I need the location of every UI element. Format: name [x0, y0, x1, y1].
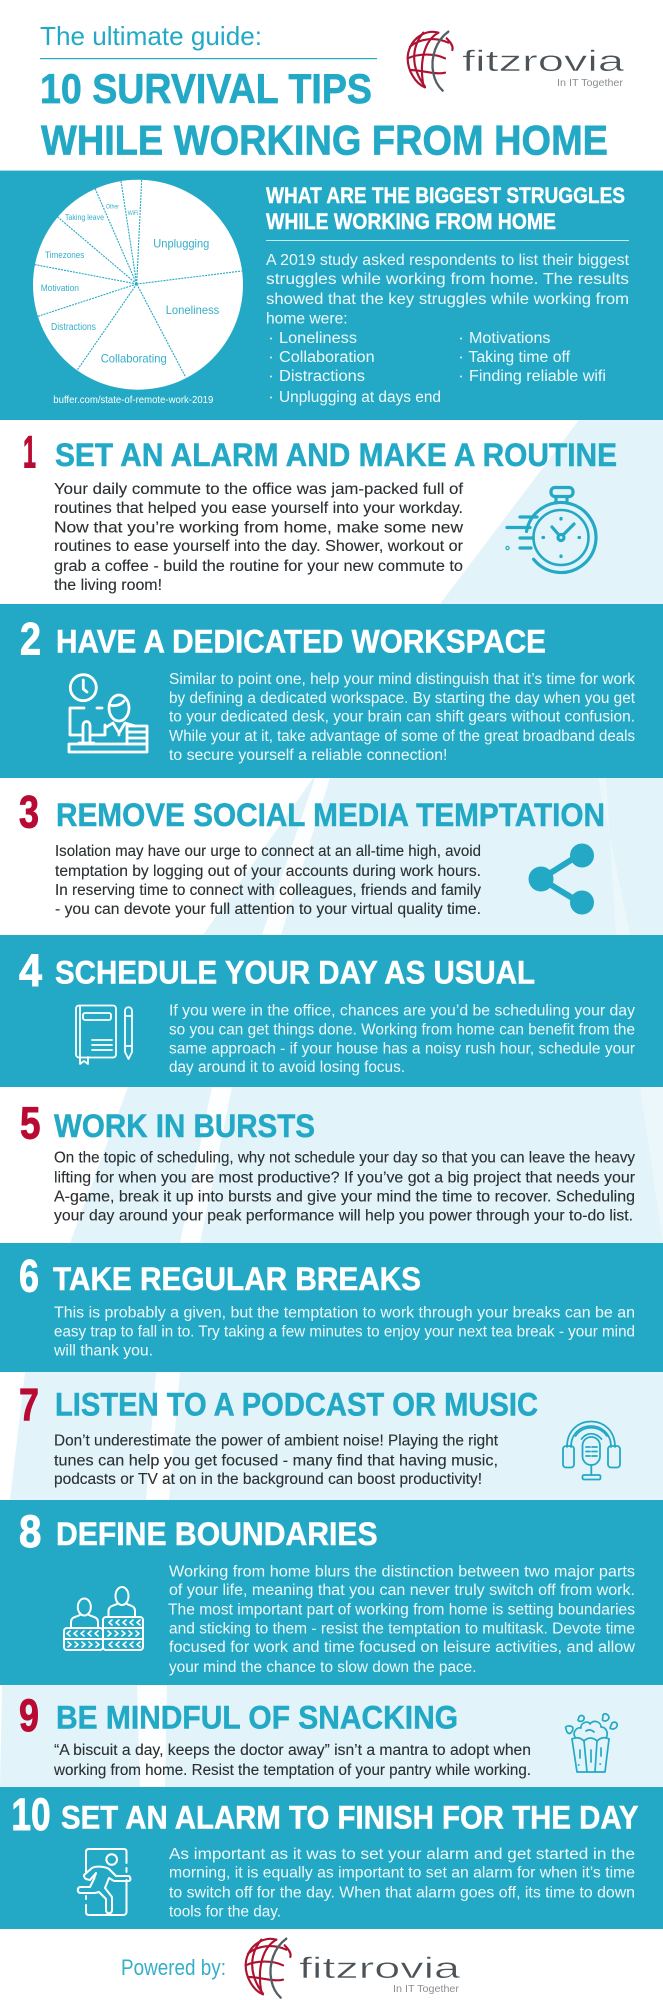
- body 8: of your life, meaning that you can never truly switch off from work.: [169, 1582, 635, 1599]
- body 6: [53, 1304, 635, 1359]
- number 10: 10: [11, 1789, 51, 1840]
- bullet list: Distractions: [279, 368, 365, 385]
- body 7: [54, 1432, 499, 1488]
- logo wordmark: fitzrovia: [462, 45, 624, 78]
- panel: tip 6: [0, 1243, 663, 1372]
- body 1: Your daily commute to the office was jam-packed full of: [54, 481, 464, 498]
- number 9: 9: [19, 1690, 39, 1741]
- logo tagline: In IT Together: [557, 78, 624, 89]
- body 8: [168, 1564, 636, 1676]
- body 2: [169, 671, 636, 764]
- body 6: This is probably a given, but the temptation to work through your breaks can be an: [54, 1304, 635, 1321]
- panel: tip 10: [0, 1787, 663, 1929]
- body 10: [169, 1846, 635, 1920]
- panel: tip 2: [0, 604, 663, 778]
- body 7: podcasts or TV at on in the background can boost productivity!: [54, 1471, 482, 1488]
- body 4: [169, 1002, 635, 1076]
- panel: tip 5: [0, 1087, 663, 1243]
- panel heading: WHILE WORKING FROM HOME: [266, 209, 556, 234]
- body 3: [55, 843, 481, 918]
- icon: red globe footer: [246, 1939, 291, 1998]
- icon: two people at desks: [64, 1587, 143, 1650]
- heading 8: DEFINE BOUNDARIES: [56, 1516, 378, 1552]
- logo: fitzrovia header: [408, 32, 624, 91]
- bullet list: Taking time off: [468, 349, 571, 366]
- heading 1: SET AN ALARM AND MAKE A ROUTINE: [55, 437, 617, 473]
- number 5: 5: [20, 1098, 40, 1148]
- body 5: [54, 1149, 635, 1224]
- body 1: routines to ease yourself into the day. Shower, workout or: [54, 538, 463, 555]
- body 1: routines that helped you ease yourself into your workday.: [54, 500, 463, 517]
- panel: tip 9: [0, 1685, 663, 1787]
- body 4: day around it to avoid losing focus.: [169, 1059, 405, 1076]
- icon: podcast microphone and headphones: [563, 1422, 620, 1480]
- body 9: “A biscuit a day, keeps the doctor away” isn’t a mantra to adopt when: [54, 1742, 531, 1759]
- body 7: tunes can help you get focused - many find that having music,: [54, 1452, 498, 1470]
- pie chart: Taking leave: [65, 212, 104, 222]
- subtitle: The ultimate guide:: [40, 21, 262, 51]
- body 4: If you were in the office, chances are you’d be scheduling your day: [169, 1002, 635, 1019]
- powered by label: Powered by:: [121, 1955, 226, 1980]
- intro paragraph: A 2019 study asked respondents to list their biggest: [266, 252, 630, 269]
- intro paragraph: struggles while working from home. The results: [266, 271, 629, 288]
- body 8: The most important part of working from home is setting boundaries: [168, 1601, 635, 1618]
- body 8: and sticking to them - resist the temptation to multitask. Devote time: [169, 1620, 635, 1637]
- icon: stopwatch: [507, 488, 602, 578]
- body 3: In reserving time to connect with colleagues, friends and family: [55, 882, 481, 899]
- panel: tip 7: [0, 1372, 663, 1500]
- icon: red globe: [408, 32, 453, 91]
- icon: person at desk: [69, 675, 147, 752]
- bullet list: Motivations: [469, 330, 551, 347]
- bullet list: Collaboration: [279, 349, 375, 366]
- pie chart: Motivation: [41, 283, 79, 294]
- number 6: 6: [19, 1251, 39, 1302]
- panel: tip 4: [0, 935, 663, 1087]
- bullet list: [270, 330, 606, 406]
- main title line 1: 10 SURVIVAL TIPS: [40, 65, 372, 112]
- body 5: lifting for when you are most productive? If you’ve got a big project that needs your: [54, 1169, 635, 1186]
- body 5: your day around your peak performance will help you power through your to-do list.: [54, 1207, 633, 1224]
- chart source: buffer.com/state-of-remote-work-2019: [53, 394, 213, 406]
- bullet list: Finding reliable wifi: [469, 368, 606, 385]
- pie chart: [33, 179, 243, 390]
- number 1: 1: [23, 427, 36, 478]
- panel: biggest struggles: [0, 170, 663, 420]
- title block: [40, 21, 608, 164]
- bullet list: Loneliness: [279, 330, 357, 347]
- body 5: A-game, break it up into bursts and give your mind the time to recover. Scheduling: [54, 1188, 635, 1205]
- body 8: Working from home blurs the distinction between two major parts: [169, 1564, 635, 1580]
- body 2: While your at it, take advantage of some of the great broadband deals: [169, 728, 635, 745]
- icon: popcorn: [566, 1714, 617, 1772]
- body 2: Similar to point one, help your mind distinguish that it’s time for work: [169, 671, 635, 688]
- pie chart: Loneliness: [166, 303, 219, 317]
- body 2: to secure yourself a reliable connection!: [169, 747, 447, 764]
- pie chart: Unplugging: [153, 237, 209, 251]
- bullet list: Unplugging at days end: [279, 389, 441, 406]
- body 1: the living room!: [54, 577, 162, 594]
- icon: notebook and pencil: [76, 1006, 132, 1064]
- footer wordmark: fitzrovia: [299, 1952, 460, 1985]
- body 8: your mind the chance to slow down the pace.: [169, 1659, 477, 1676]
- body 6: will thank you.: [53, 1342, 153, 1359]
- panel: tip 1: [0, 420, 663, 604]
- footer tagline: In IT Together: [393, 1984, 460, 1995]
- number 2: 2: [20, 613, 41, 664]
- heading 9: BE MINDFUL OF SNACKING: [56, 1700, 458, 1736]
- pie chart: Distractions: [51, 322, 96, 333]
- heading 3: REMOVE SOCIAL MEDIA TEMPTATION: [56, 797, 605, 833]
- body 5: On the topic of scheduling, why not schedule your day so that you can leave the heavy: [54, 1149, 635, 1166]
- body 9: [53, 1742, 531, 1779]
- heading 5: WORK IN BURSTS: [54, 1108, 315, 1144]
- panel: tip 8: [0, 1500, 663, 1685]
- body 10: morning, it is equally as important to set an alarm for when it’s time: [169, 1864, 635, 1881]
- body 3: Isolation may have our urge to connect at an all-time high, avoid: [55, 843, 481, 860]
- body 3: - you can devote your full attention to your virtual quality time.: [55, 901, 481, 918]
- panel heading: [266, 183, 625, 234]
- heading 7: LISTEN TO A PODCAST OR MUSIC: [55, 1386, 538, 1422]
- body 10: As important as it was to set your alarm and get started in the: [169, 1846, 635, 1863]
- footer: [121, 1939, 460, 1998]
- number 8: 8: [19, 1506, 41, 1557]
- pie chart: Timezones: [45, 250, 85, 261]
- number 7: 7: [19, 1379, 39, 1430]
- body 10: to switch off for the day. When that alarm goes off, its time to down: [169, 1885, 635, 1902]
- body 1: grab a coffee - build the routine for your new commute to: [54, 558, 463, 575]
- intro paragraph: home were:: [266, 310, 348, 327]
- intro paragraph: showed that the key struggles while working from: [266, 291, 629, 308]
- intro paragraph: [266, 252, 630, 327]
- pie chart: Collaborating: [101, 352, 167, 366]
- body 8: focused for work and time focused on leisure activities, and allow: [169, 1639, 636, 1656]
- body 9: working from home. Resist the temptation of your pantry while working.: [53, 1762, 531, 1779]
- body 2: to your dedicated desk, your brain can shift gears without confusion.: [169, 709, 635, 726]
- icon: share: [528, 844, 594, 914]
- body 4: so you can get things done. Working from home can benefit from the: [169, 1021, 635, 1038]
- number 3: 3: [19, 786, 39, 838]
- body 10: tools for the day.: [169, 1903, 281, 1920]
- body 4: same approach - if your house has a noisy rush hour, schedule your: [169, 1040, 635, 1057]
- heading 2: HAVE A DEDICATED WORKSPACE: [56, 624, 546, 660]
- body 7: Don’t underestimate the power of ambient noise! Playing the right: [54, 1432, 499, 1450]
- pie chart: WiFi: [128, 211, 138, 217]
- heading 6: TAKE REGULAR BREAKS: [53, 1261, 421, 1297]
- body 1: Now that you’re working from home, make some new: [54, 519, 464, 536]
- body 3: temptation by logging out of your accounts during work hours.: [55, 863, 481, 880]
- number 4: 4: [19, 945, 42, 996]
- body 1: [54, 481, 464, 594]
- body 2: by defining a dedicated workspace. By starting the day when you get: [169, 690, 636, 707]
- heading 4: SCHEDULE YOUR DAY AS USUAL: [55, 954, 535, 990]
- pie chart: Other: [106, 205, 119, 211]
- icon: person leaving through door: [78, 1849, 130, 1915]
- body 6: easy trap to fall in to. Try taking a few minutes to enjoy your next tea break - your mind: [54, 1323, 635, 1340]
- panel: tip 3: [0, 778, 663, 935]
- main title line 2: WHILE WORKING FROM HOME: [41, 116, 608, 164]
